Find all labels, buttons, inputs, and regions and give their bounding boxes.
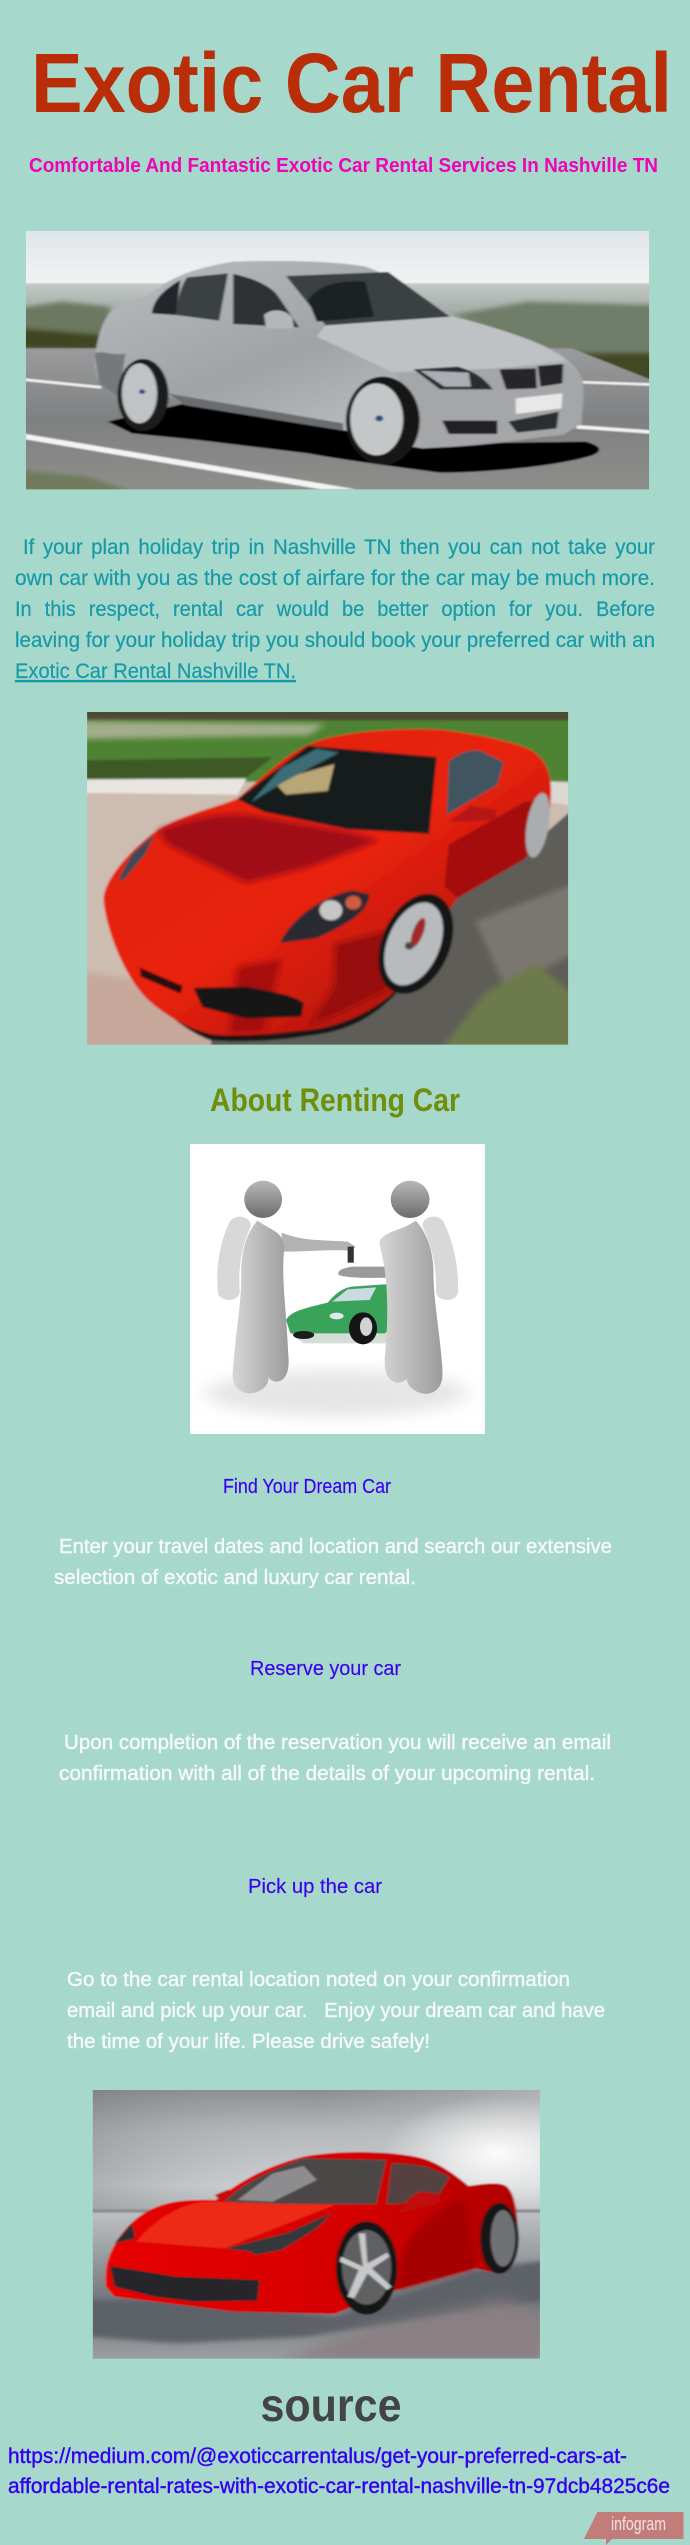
intro paragraph: own car with you as the cost of airfare for the car may be much more. [15,566,655,590]
ferrari body [174,990,396,1042]
step 2 text: Upon completion of the reservation you will receive an email [64,1732,611,1754]
step 3 text [67,1969,605,2053]
intro paragraph: Exotic Car Rental Nashville TN. [15,659,296,683]
step 1 heading: Find Your Dream Car [223,1476,391,1498]
source url: https://medium.com/@exoticcarrentalus/get-your-preferred-cars-at- [8,2445,627,2468]
step 1 text: Enter your travel dates and location and search our extensive [59,1536,612,1558]
infogram badge [584,2512,684,2545]
ferrari 458 body [105,2152,518,2314]
image: silver sedan on road [18,227,656,493]
intro paragraph [15,535,655,683]
step 1 text [54,1536,612,1589]
source url: affordable-rental-rates-with-exotic-car-rental-nashville-tn-97dcb4825c6e [8,2475,670,2498]
step 3 text: Go to the car rental location noted on your confirmation [67,1969,570,1991]
step 1 text: selection of exotic and luxury car rental. [54,1567,416,1589]
green car [286,1284,389,1344]
image: red ferrari in studio [92,2090,540,2359]
step 3 text: the time of your life. Please drive safely! [67,2031,430,2053]
image: key handover figures [190,1144,485,1434]
right figure [338,1181,447,1394]
intro paragraph: If your plan holiday trip in Nashville TN then you can not take your [23,535,655,559]
infogram badge: infogram [611,2514,666,2534]
heading: source: source [260,2379,402,2431]
subtitle: Comfortable And Fantastic Exotic Car Rental Services In Nashville TN [29,155,658,177]
left figure [228,1181,356,1393]
heading: about renting car: About Renting Car [210,1082,460,1118]
image: red sports car in driveway [79,707,576,1051]
step 2 heading: Reserve your car [250,1658,401,1680]
intro paragraph: In this respect, rental car would be better option for you. Before [15,597,655,621]
intro paragraph: leaving for your holiday trip you should book your preferred car with an [15,628,655,652]
step 2 text [59,1732,611,1785]
step 3 text: email and pick up your car. Enjoy your dream car and have [67,2000,605,2022]
source url [8,2445,670,2498]
sedan body [95,261,584,448]
step 2 text: confirmation with all of the details of your upcoming rental. [59,1763,595,1785]
step 3 heading: Pick up the car [248,1876,382,1898]
